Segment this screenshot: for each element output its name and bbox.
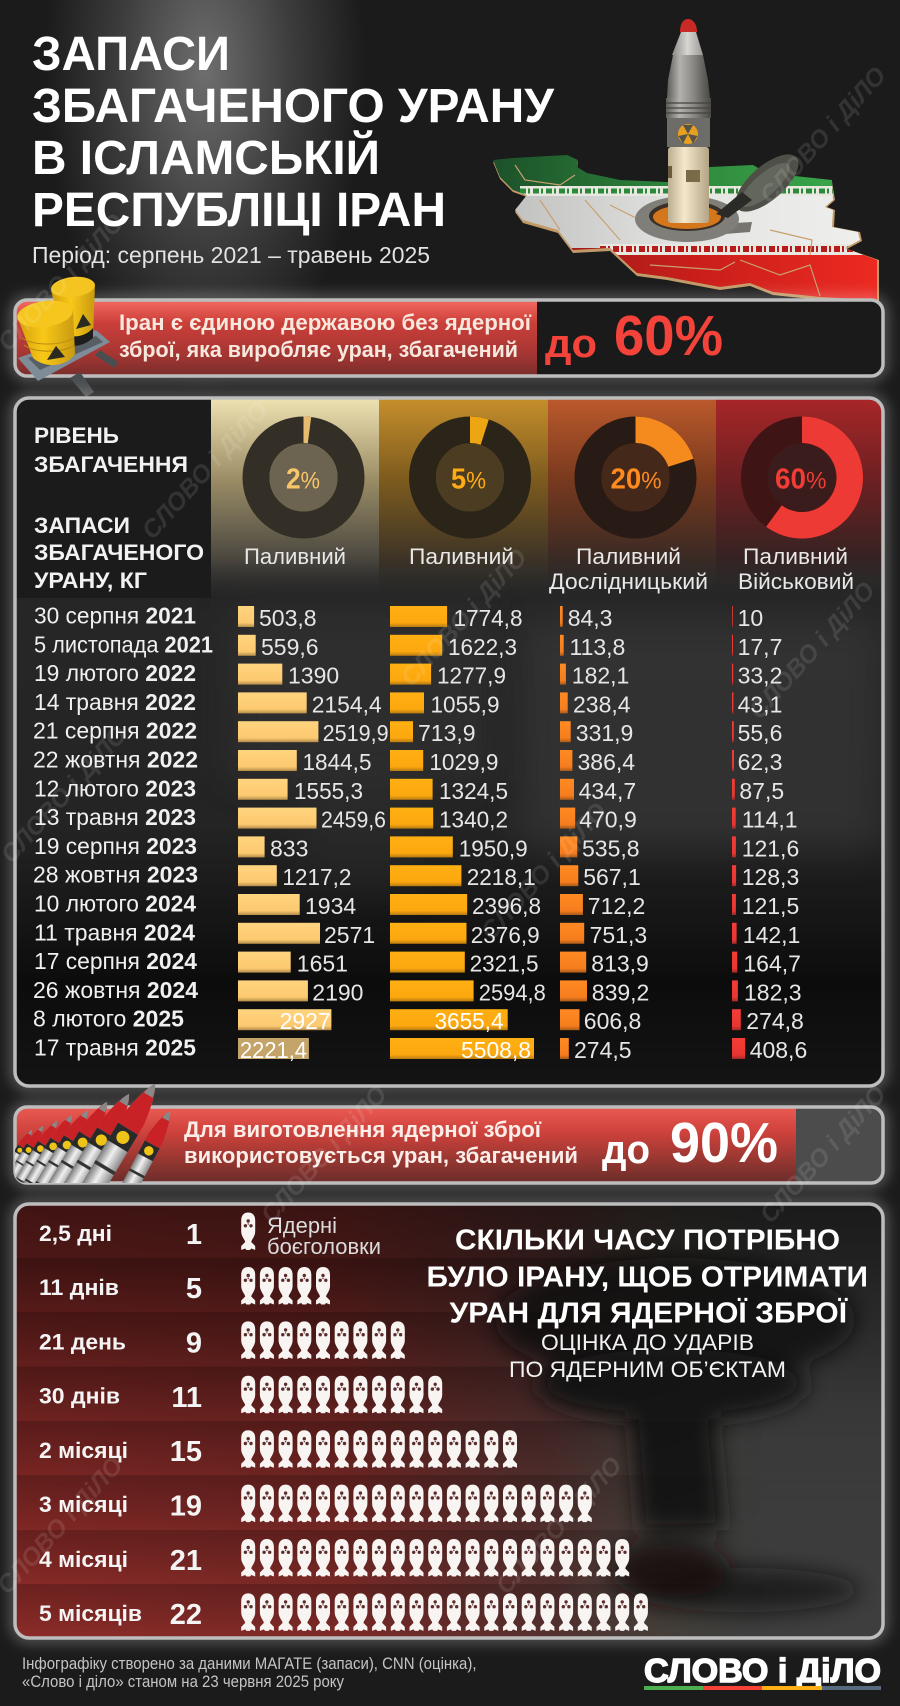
donut: 2%: 2%: [286, 464, 320, 496]
bar chart: 20% research fuel: 84,3: [568, 605, 612, 631]
bar chart: 60% military fuel: 33,2: [738, 663, 782, 689]
bar chart: 60% military fuel: 55,6: [738, 720, 782, 746]
date column: 13 травня 2023: [34, 804, 196, 830]
warhead counts: [170, 1219, 202, 1631]
donut: 5%: [422, 416, 518, 525]
date column: 17 серпня 2024: [34, 948, 197, 974]
date column: 19 серпня 2023: [34, 833, 197, 859]
bar chart: 20% research fuel: 182,1: [572, 663, 629, 689]
bar chart: 60% military fuel: [732, 605, 807, 1063]
bar chart: 2% fuel: 2519,9: [323, 720, 389, 746]
bar chart: 2% fuel: [238, 605, 389, 1063]
bar chart: 5% fuel: 2321,5: [470, 951, 539, 977]
hatch lid: [716, 145, 808, 221]
date column: 14 травня 2022: [34, 689, 196, 715]
bar chart: 5% fuel: 2396,8: [472, 893, 541, 919]
legend: warheads: боєголовки: [267, 1234, 381, 1259]
bar chart: 20% research fuel: 386,4: [578, 749, 635, 775]
subtitle: period: Період: серпень 2021 – травень 2025: [32, 242, 430, 268]
statement text: зброї, яка виробляє уран, збагачений: [119, 337, 518, 362]
bar chart: 20% research fuel: 434,7: [579, 778, 636, 804]
value: up to 60%: [545, 304, 723, 368]
bar chart: 20% research fuel: 331,9: [576, 720, 633, 746]
bar chart: 5% fuel: 1029,9: [429, 749, 498, 775]
category labels: Паливний: [576, 544, 681, 569]
value: up to 90%: до: [602, 1128, 650, 1172]
row label: stockpile in kg: УРАНУ, КГ: [34, 568, 148, 593]
bar chart: 5% fuel: 1622,3: [448, 634, 517, 660]
row label: enrichment level: [34, 423, 188, 477]
warhead counts: 9: [186, 1328, 202, 1360]
donut: 5%: 5%: [451, 464, 486, 496]
bar chart: 2% fuel: 2571: [324, 922, 375, 948]
bar chart: 5% fuel: 1950,9: [459, 835, 528, 861]
panel: time needed to obtain weapons-grade uranium: [15, 1204, 883, 1638]
donut: 20%: [588, 416, 694, 525]
panel heading: [426, 1224, 868, 1330]
bar chart: 5% fuel: 1774,8: [454, 605, 522, 631]
bar chart: 20% research fuel: 712,2: [588, 893, 645, 919]
time labels: 4 місяці: [39, 1547, 128, 1572]
bar chart: 2% fuel: 833: [270, 835, 308, 861]
row label: enrichment level: ЗБАГАЧЕННЯ: [34, 452, 188, 477]
date column: 21 серпня 2022: [33, 718, 197, 744]
title: РЕСПУБЛІЦІ ІРАН: [32, 184, 446, 237]
icon row: 15 warheads: [241, 1430, 517, 1468]
panel: only state enriching to 60%: [15, 300, 883, 376]
icon row: 9 warheads: [241, 1321, 405, 1359]
bar chart: 20% research fuel: 113,8: [570, 634, 625, 660]
panel heading: УРАН ДЛЯ ЯДЕРНОЇ ЗБРОЇ: [450, 1297, 848, 1330]
bar chart: 60% military fuel: 17,7: [738, 634, 782, 660]
bar chart: 60% military fuel: 62,3: [738, 749, 782, 775]
warhead counts: 21: [170, 1545, 202, 1577]
legend: warheads: [267, 1213, 381, 1259]
time labels: 2 місяці: [39, 1438, 128, 1463]
icon: uranium barrels on pallet: [15, 275, 118, 397]
bar chart: 2% fuel: 1651: [297, 951, 348, 977]
bar chart: 5% fuel: 5508,8: [461, 1037, 531, 1063]
date column: 19 лютого 2022: [34, 660, 196, 686]
statement text: Для виготовлення ядерної зброї: [184, 1117, 542, 1142]
source note: «Слово і діло» станом на 23 червня 2025 року: [22, 1672, 344, 1691]
row label: stockpile in kg: [34, 513, 204, 593]
bar chart: 2% fuel: 1217,2: [282, 864, 351, 890]
bar chart: 5% fuel: 2218,1: [467, 864, 536, 890]
bar chart: 5% fuel: 1324,5: [439, 778, 508, 804]
bar chart: 60% military fuel: 87,5: [739, 778, 784, 804]
category labels: Паливний: [409, 544, 514, 569]
bar chart: 5% fuel: 1277,9: [437, 663, 506, 689]
category labels: Дослідницький: [549, 569, 708, 594]
date column: 10 лютого 2024: [34, 890, 196, 916]
bar chart: 60% military fuel: 142,1: [743, 922, 800, 948]
bar chart: 2% fuel: 503,8: [259, 605, 317, 631]
time labels: 5 місяців: [39, 1601, 142, 1626]
panel subheading: ПО ЯДЕРНИМ ОБ’ЄКТАМ: [509, 1357, 786, 1382]
bar chart: 60% military fuel: 128,3: [742, 864, 799, 890]
watermarks: СЛОВО і ДіЛО: [754, 61, 892, 210]
watermarks: СЛОВО і ДіЛО: [743, 576, 881, 725]
time labels: 30 днів: [39, 1384, 120, 1408]
bar chart: 20% research fuel: [560, 605, 649, 1063]
source note: Інфографіку створено за даними МАГАТЕ (запаси), CNN (оцінка),: [22, 1654, 476, 1673]
date column: [33, 602, 213, 1060]
legend: warheads: Ядерні: [267, 1213, 337, 1238]
bar chart: 2% fuel: 1934: [305, 893, 356, 919]
donut: 60%: [754, 416, 863, 538]
logo: Slovo i Dilo: СЛОВО і ДіЛО: [644, 1652, 881, 1689]
missile: [666, 19, 711, 223]
bar chart: 60% military fuel: 274,8: [746, 1008, 804, 1034]
watermarks: СЛОВО і ДіЛО: [136, 396, 274, 545]
value: up to 90%: [602, 1111, 778, 1175]
bar chart: 2% fuel: 2221,4: [240, 1037, 307, 1063]
warhead counts: 22: [170, 1599, 202, 1631]
bar chart: 20% research fuel: 535,8: [582, 835, 640, 861]
bar chart: 60% military fuel: 182,3: [744, 979, 802, 1005]
bar chart: 2% fuel: 1555,3: [294, 778, 363, 804]
category labels: Паливний: [244, 544, 346, 569]
bar chart: 2% fuel: 1844,5: [302, 749, 372, 775]
icon row: 19 warheads: [241, 1485, 592, 1522]
icon row: 1 warhead: [241, 1212, 255, 1250]
title: [32, 28, 555, 237]
date column: 22 жовтня 2022: [33, 746, 198, 772]
bar chart: 2% fuel: 2154,4: [312, 691, 382, 717]
time labels: 21 день: [39, 1330, 126, 1354]
date column: 12 лютого 2023: [34, 775, 196, 801]
row label: stockpile in kg: ЗАПАСИ: [34, 513, 130, 538]
icon row: 5 warheads: [241, 1267, 330, 1304]
value: up to 60%: до: [545, 322, 597, 366]
bar chart: 20% research fuel: 606,8: [584, 1008, 641, 1034]
bar chart: 5% fuel: 2594,8: [479, 979, 546, 1005]
statement text: Іран є єдиною державою без ядерної: [119, 310, 532, 335]
icon row: 21 warheads: [241, 1539, 629, 1576]
date column: 11 травня 2024: [34, 919, 195, 945]
panel subheading: ОЦІНКА ДО УДАРІВ: [541, 1330, 754, 1355]
warhead counts: 11: [171, 1382, 202, 1414]
date column: 30 серпня 2021: [34, 602, 196, 628]
panel subheading: [509, 1330, 786, 1382]
date column: 28 жовтня 2023: [33, 862, 198, 888]
bar chart: 20% research fuel: 567,1: [583, 864, 641, 890]
mushroom cloud: [495, 1258, 860, 1612]
bar chart: 2% fuel: 2190: [312, 979, 363, 1005]
bar chart: 20% research fuel: 274,5: [574, 1037, 632, 1063]
panel heading: СКІЛЬКИ ЧАСУ ПОТРІБНО: [455, 1224, 840, 1256]
bar chart: 5% fuel: 1340,2: [439, 807, 508, 833]
bar chart: 60% military fuel: 10: [738, 605, 763, 631]
bar chart: 60% military fuel: 408,6: [750, 1037, 807, 1063]
statement text: [119, 310, 532, 362]
watermarks: СЛОВО і ДіЛО: [754, 1080, 892, 1229]
illustration: map of Iran with missile: [490, 19, 890, 304]
time labels: 3 місяці: [39, 1492, 128, 1517]
bar chart: 60% military fuel: 164,7: [743, 951, 801, 977]
icon row: 11 warheads: [241, 1376, 442, 1413]
icon row: 22 warheads: [241, 1593, 648, 1631]
bar chart: 2% fuel: 1390: [288, 663, 339, 689]
title: ЗБАГАЧЕНОГО УРАНУ: [32, 80, 555, 133]
date column: 17 травня 2025: [34, 1034, 196, 1060]
category labels: [244, 544, 854, 594]
watermarks: СЛОВО і ДіЛО: [490, 1451, 628, 1600]
title: В ІСЛАМСЬКІЙ: [32, 130, 380, 185]
bar chart: 2% fuel: 559,6: [261, 634, 319, 660]
donut: 20%: 20%: [610, 464, 662, 496]
date column: 8 лютого 2025: [33, 1006, 184, 1032]
value: up to 60%: 60%: [614, 304, 723, 368]
bar chart: 20% research fuel: 751,3: [590, 922, 647, 948]
row label: stockpile in kg: ЗБАГАЧЕНОГО: [34, 540, 204, 565]
bar chart: 60% military fuel: 121,6: [742, 835, 799, 861]
warhead counts: 19: [170, 1490, 202, 1522]
bar chart: 2% fuel: 2927: [280, 1008, 331, 1034]
watermarks: СЛОВО і ДіЛО: [475, 797, 613, 946]
bar chart: 5% fuel: 1055,9: [430, 691, 500, 717]
date column: 5 листопада 2021: [34, 631, 213, 657]
donut: 60%: 60%: [775, 464, 826, 496]
category labels: Паливний: [743, 544, 848, 569]
bar chart: 20% research fuel: 813,9: [591, 951, 649, 977]
panel: weapons need 90%: [15, 1107, 883, 1183]
date column: 26 жовтня 2024: [33, 977, 198, 1003]
value: up to 90%: 90%: [670, 1111, 778, 1175]
bar chart: 60% military fuel: 121,5: [742, 893, 799, 919]
bar chart: 20% research fuel: 839,2: [592, 979, 649, 1005]
bar chart: 5% fuel: 2376,9: [471, 922, 540, 948]
warhead counts: 5: [186, 1273, 202, 1305]
bar chart: 5% fuel: [390, 605, 546, 1063]
panel: enrichment levels and stockpiles: [15, 398, 884, 1086]
icon: missiles: [15, 1084, 170, 1183]
watermarks: СЛОВО і ДіЛО: [255, 1080, 393, 1229]
bar chart: 5% fuel: 3655,4: [434, 1008, 504, 1034]
bar chart: 60% military fuel: 43,1: [738, 691, 782, 717]
bar chart: 20% research fuel: 470,9: [579, 807, 637, 833]
bar chart: 5% fuel: 713,9: [418, 720, 476, 746]
time labels: 11 днів: [39, 1275, 119, 1300]
title: ЗАПАСИ: [32, 28, 230, 81]
bar chart: 20% research fuel: 238,4: [573, 691, 631, 717]
bar chart: 2% fuel: 2459,6: [321, 807, 386, 833]
warhead counts: 1: [186, 1219, 202, 1251]
watermarks: СЛОВО і ДіЛО: [395, 543, 533, 692]
row label: enrichment level: РІВЕНЬ: [34, 423, 119, 448]
warhead counts: 15: [170, 1436, 202, 1468]
statement text: використовується уран, збагачений: [184, 1143, 578, 1168]
statement text: [184, 1117, 578, 1168]
bar chart: 60% military fuel: 114,1: [742, 807, 798, 833]
donut: 2%: [256, 416, 351, 525]
time labels: 2,5 дні: [39, 1221, 112, 1246]
time labels: [39, 1221, 142, 1626]
source note: [22, 1654, 476, 1691]
hatch ring: [635, 196, 752, 242]
category labels: Військовий: [738, 569, 854, 594]
panel heading: БУЛО ІРАНУ, ЩОБ ОТРИМАТИ: [426, 1262, 868, 1294]
